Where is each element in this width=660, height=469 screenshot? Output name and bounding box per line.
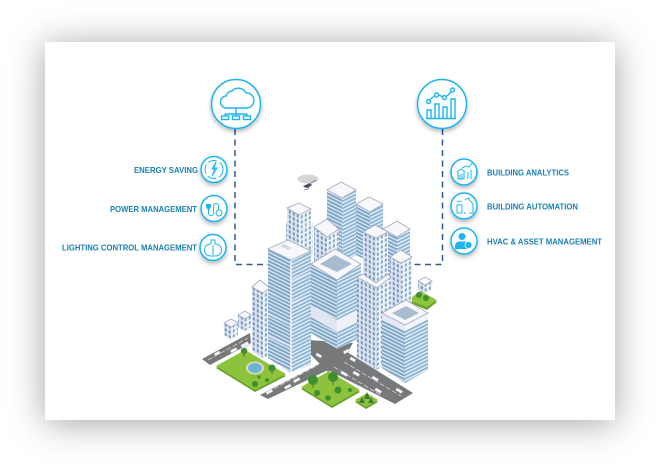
label: power management: POWER MANAGEMENT [110, 204, 198, 214]
city illustration [202, 182, 437, 409]
label: building analytics: BUILDING ANALYTICS [487, 168, 569, 178]
park: left with fountain [216, 348, 286, 392]
tower: back middle [356, 197, 383, 262]
icon: building automation [451, 193, 477, 219]
icon: lighting bulb [200, 234, 226, 260]
label: lighting control management: LIGHTING CONTROL MANAGEMENT [62, 242, 198, 252]
label: building automation: BUILDING AUTOMATION [487, 202, 578, 212]
tower: center wide [311, 249, 361, 349]
white card panel [45, 42, 615, 420]
icon: hvac engineer [451, 228, 477, 254]
label: energy saving: ENERGY SAVING [134, 165, 198, 175]
park: center [301, 371, 360, 408]
park: top right [408, 291, 437, 310]
left connector dashed line [235, 129, 270, 264]
tower: left stepped [286, 203, 313, 262]
cars [214, 341, 403, 395]
tower: center right stepped [357, 225, 391, 370]
icon: energy saving [201, 156, 227, 182]
icon: cloud network [212, 80, 260, 128]
icon: power management [201, 196, 227, 222]
park: small [355, 392, 378, 409]
road: upper left [202, 333, 251, 365]
tower: back tall [327, 182, 356, 262]
tower: far right stepped [390, 250, 412, 322]
icon: drone [298, 174, 318, 190]
label: hvac and asset management: HVAC & ASSET MANAGEMENT [487, 236, 603, 246]
tower: back right [383, 221, 410, 280]
small buildings left [224, 311, 251, 339]
tower: front right [382, 300, 428, 383]
tower: small left [252, 280, 270, 358]
icon: building analytics [451, 159, 477, 185]
road: front left [260, 363, 328, 399]
tower: small middle [314, 219, 339, 275]
icon: analytics chart [418, 80, 466, 128]
tower: large front left [268, 240, 311, 373]
road markings [208, 338, 401, 396]
road: right [328, 352, 413, 404]
small buildings right [418, 277, 432, 294]
road: central intersection [308, 340, 353, 372]
right connector dashed line [410, 129, 442, 264]
